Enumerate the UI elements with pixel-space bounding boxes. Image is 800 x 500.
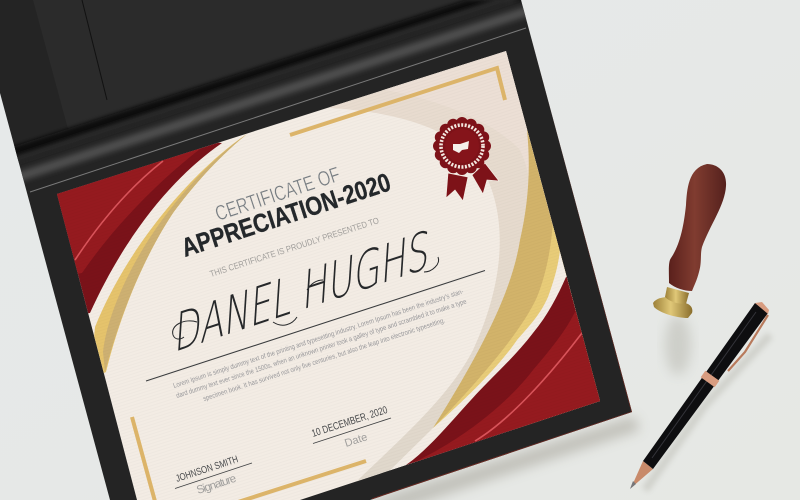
right cream band — [390, 251, 600, 470]
body text paragraph: dard dummy text ever since the 1500s, when an unknown printer took a galley of type and scrambled it to make a type — [175, 298, 468, 400]
icon: wax seal stamp — [653, 164, 726, 318]
left dark red wave — [57, 142, 222, 314]
panel: black folder — [0, 0, 640, 500]
folder shadow — [360, 416, 640, 500]
pen ring — [701, 371, 719, 387]
folder hinge fold — [0, 0, 560, 192]
signature block: JOHNSON SMITH — [175, 454, 240, 485]
stamp shadow — [665, 315, 691, 375]
name underline — [146, 270, 485, 381]
left bright red wave — [57, 149, 200, 274]
seal ribbon badge — [433, 117, 499, 201]
folder inner pocket — [33, 0, 467, 129]
seal emblem — [453, 141, 469, 153]
ribbon tails — [446, 173, 468, 201]
left pink stripe — [75, 161, 163, 260]
laurel ring — [441, 125, 483, 167]
pen clip — [728, 315, 768, 371]
stamp base — [653, 297, 692, 318]
scalloped medallion — [433, 117, 491, 175]
right bright red wave — [416, 312, 600, 462]
signature block: Signature — [195, 473, 238, 497]
right pink stripe — [475, 333, 582, 441]
date block — [310, 404, 391, 450]
pen cap — [755, 302, 769, 314]
stamp collar — [665, 287, 689, 304]
gold bracket bottom — [235, 461, 366, 500]
date block: 10 DECEMBER, 2020 — [310, 404, 389, 440]
paper texture — [40, 40, 640, 500]
icon: ballpoint pen — [630, 302, 769, 489]
body text paragraph: specimen book. It has survived not only five centuries, but also the leap into electronic typesetting. — [202, 317, 446, 403]
title: appreciation-2020: APPRECIATION-2020 — [178, 167, 394, 263]
beige outer top right — [384, 51, 557, 240]
folder red edge — [372, 0, 632, 499]
grey ring band — [330, 54, 600, 482]
subtitle: presented to: THIS CERTIFICATE IS PROUDLY PRESENTED TO — [209, 215, 380, 279]
left tan swoosh — [103, 134, 247, 372]
panel: certificate sheet — [57, 51, 600, 500]
date block: Date — [343, 431, 369, 450]
pen barrel — [643, 303, 768, 469]
right yellow swoosh — [434, 224, 600, 427]
gold bracket top right — [290, 68, 505, 135]
right dark red wave — [405, 276, 600, 466]
gold bracket bottom left — [132, 417, 156, 500]
signature block — [175, 454, 252, 497]
pen shadow — [645, 335, 770, 490]
name flourishes — [173, 257, 439, 339]
body text paragraph: Lorem Ipsum is simply dummy text of the printing and typesetting industry. Lorem Ipsum has been the industry's stan- — [172, 288, 465, 390]
pen tip — [631, 461, 653, 488]
right tan swoosh — [433, 130, 600, 428]
stamp wood handle — [669, 164, 726, 291]
left yellow swoosh — [90, 134, 247, 380]
title: certificate of: CERTIFICATE OF — [212, 163, 343, 226]
recipient name: DANEL HUGHS — [173, 219, 432, 365]
